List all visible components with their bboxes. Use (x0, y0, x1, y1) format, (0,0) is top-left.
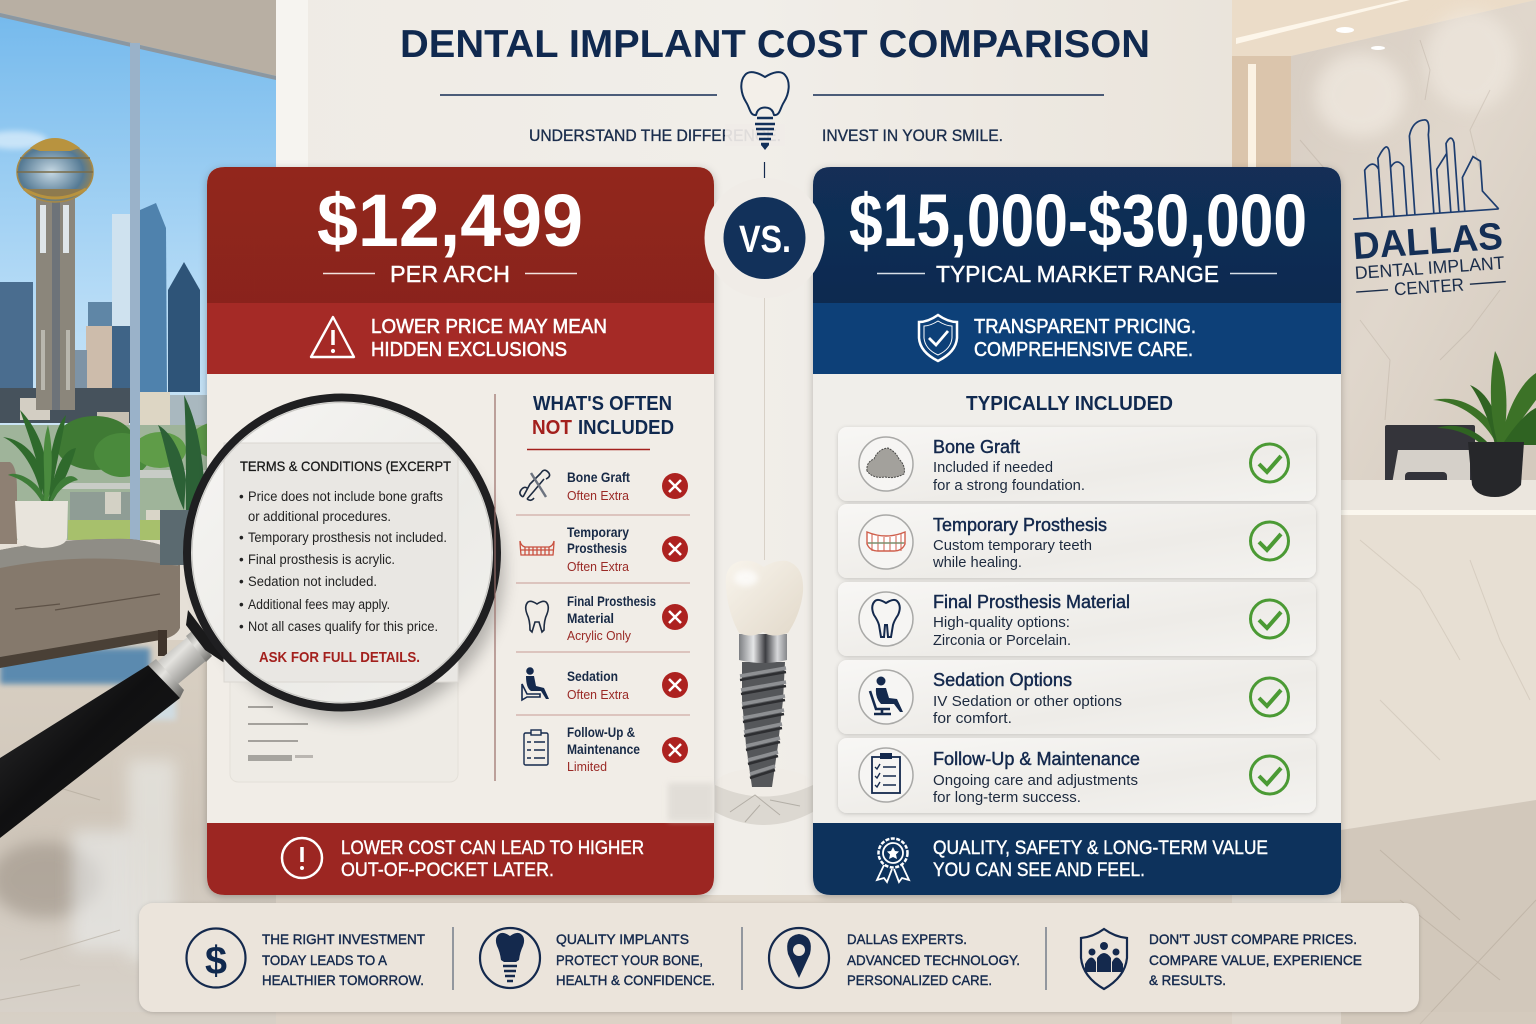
back plant (158, 395, 205, 510)
icon: exclamation circle (282, 838, 322, 878)
row: bone graft often extra (520, 469, 688, 503)
warning text: LOWER PRICE MAY MEAN (371, 316, 607, 338)
row: follow-up limited: Limited (567, 759, 607, 774)
magnifier handle (0, 664, 180, 838)
card: final prosthesis material included: Final Prosthesis Material (933, 592, 1130, 612)
terms text: Price does not include bone grafts (248, 489, 443, 504)
row: sedation often extra: Often Extra (567, 687, 630, 702)
row: bone graft often extra: Often Extra (567, 488, 630, 503)
icon: denture (859, 515, 913, 569)
magnifier lens (187, 398, 497, 708)
terms text: • (239, 552, 244, 567)
icon: seated patient (859, 670, 913, 724)
icon: warning triangle (311, 317, 354, 357)
benefit: right investment (186, 928, 425, 988)
Reunion Tower (17, 138, 93, 410)
terms text: ASK FOR FULL DETAILS. (259, 649, 420, 666)
row: temporary prosthesis often extra (520, 524, 688, 574)
check mark (1250, 600, 1288, 638)
card: follow-up and maintenance included: for long-term success. (933, 790, 1081, 806)
terms text: • (239, 489, 244, 504)
benefit: Dallas experts: PERSONALIZED CARE. (847, 972, 992, 988)
benefit: quality implants: HEALTH & CONFIDENCE. (556, 972, 715, 988)
terms text: Sedation not included. (248, 574, 377, 589)
terms text: • (239, 619, 244, 634)
panel: market price (blue) (813, 167, 1341, 895)
left price header (207, 167, 714, 303)
terms text: or additional procedures. (248, 509, 391, 524)
icon: map pin (769, 928, 829, 988)
benefit: compare value (1081, 929, 1362, 989)
right footer message: QUALITY, SAFETY & LONG-TERM VALUE (933, 838, 1268, 859)
icon: award rosette (877, 838, 909, 882)
logo wordmark: DALLAS (1352, 216, 1504, 268)
row: bone graft often extra: Bone Graft (567, 469, 630, 485)
panel: our price (red) (207, 167, 714, 895)
benefit: compare value: COMPARE VALUE, EXPERIENCE (1149, 952, 1362, 968)
row: final prosthesis material acrylic only: Material (567, 610, 614, 626)
right pricing band (813, 303, 1341, 374)
benefit: compare value: & RESULTS. (1149, 972, 1226, 988)
pricing text: COMPREHENSIVE CARE. (974, 339, 1193, 361)
right price heading (849, 179, 1307, 287)
icon: bone (520, 470, 550, 500)
card: final prosthesis material included: Zirconia or Porcelain. (933, 633, 1071, 649)
benefit: Dallas experts: ADVANCED TECHNOLOGY. (847, 952, 1020, 968)
card: bone graft included: Bone Graft (933, 437, 1020, 457)
card: temporary prosthesis included (838, 504, 1316, 578)
center vertical guide lines (764, 162, 766, 560)
right price heading: $15,000-$30,000 (849, 179, 1307, 262)
left footer band (207, 823, 714, 895)
card: temporary prosthesis included: Temporary Prosthesis (933, 515, 1107, 535)
benefit: quality implants (480, 928, 715, 988)
title: DENTAL IMPLANT COST COMPARISON (400, 23, 1150, 66)
card: follow-up and maintenance included: Ongoing care and adjustments (933, 773, 1138, 789)
check mark (1250, 444, 1288, 482)
left footer message (282, 838, 644, 881)
right price header (813, 167, 1341, 303)
card: temporary prosthesis included: Custom temporary teeth (933, 538, 1092, 554)
card: follow-up and maintenance included: Follow-Up & Maintenance (933, 749, 1140, 769)
card: sedation options included (838, 660, 1316, 734)
bottom benefits strip (139, 903, 1419, 1012)
warning text (371, 316, 607, 361)
left panel body (207, 167, 714, 895)
terms text (239, 458, 451, 666)
benefit: quality implants: QUALITY IMPLANTS (556, 931, 689, 947)
benefit: right investment: THE RIGHT INVESTMENT (262, 931, 425, 947)
terms text: Final prosthesis is acrylic. (248, 552, 395, 567)
wall logo: Dallas Dental Implant Center (1345, 115, 1506, 302)
left footer message: LOWER COST CAN LEAD TO HIGHER (341, 838, 644, 859)
terms text: Temporary prosthesis not included. (248, 530, 447, 545)
terms text: Additional fees may apply. (248, 597, 390, 612)
exclusions column divider (494, 394, 496, 781)
magnifying glass (0, 398, 504, 838)
sofa plant (3, 410, 78, 502)
terms text: • (239, 530, 244, 545)
trees and city below (0, 425, 276, 540)
terms text: TERMS & CONDITIONS (EXCERPT (240, 458, 451, 474)
row: follow-up limited (524, 724, 688, 774)
wall logo: Dallas Dental Implant Center: CENTER (1393, 275, 1465, 299)
row: follow-up limited: Follow-Up & (567, 724, 635, 740)
row: temporary prosthesis often extra: Temporary (567, 524, 629, 540)
row: final prosthesis material acrylic only (526, 593, 688, 643)
terms document (lower sheet) (230, 620, 458, 782)
wall logo: Dallas Dental Implant Center: DENTAL IMPLANT (1354, 253, 1505, 283)
heading: what's often not included: INCLUDED (578, 417, 674, 439)
card: sedation options included: Sedation Options (933, 670, 1072, 690)
icon: clipboard (524, 730, 548, 765)
card: sedation options included: IV Sedation or other options (933, 694, 1122, 710)
benefit: right investment: HEALTHIER TOMORROW. (262, 972, 424, 988)
right panel body (813, 167, 1341, 895)
left footer message: OUT-OF-POCKET LATER. (341, 860, 554, 881)
icon: tooth (526, 601, 548, 632)
check mark (1250, 678, 1288, 716)
icon: tooth implant (859, 592, 913, 646)
subtitle: INVEST IN YOUR SMILE. (822, 127, 1003, 145)
terms text: Not all cases qualify for this price. (248, 619, 438, 634)
card: follow-up and maintenance included (838, 738, 1316, 813)
panel notch behind VS badge (704, 178, 824, 298)
reception plant (1433, 351, 1536, 497)
row: final prosthesis material acrylic only: Acrylic Only (567, 628, 631, 643)
marble base edge over panels (668, 783, 714, 821)
icon: seated patient (522, 667, 549, 700)
icon: Dallas skyline outline (1347, 115, 1499, 219)
heading: what's often not included (527, 393, 674, 450)
check mark (1250, 522, 1288, 560)
row: sedation often extra (522, 667, 688, 702)
benefit: quality implants: PROTECT YOUR BONE, (556, 952, 703, 968)
pricing text (974, 316, 1196, 361)
card: final prosthesis material included (838, 582, 1316, 656)
heading: what's often not included: WHAT'S OFTEN (533, 393, 672, 415)
card: bone graft included: Included if needed (933, 460, 1053, 476)
pricing text: TRANSPARENT PRICING. (974, 316, 1196, 338)
card: temporary prosthesis included: while healing. (932, 555, 1022, 571)
icon: denture (520, 541, 554, 555)
benefit: Dallas experts (769, 928, 1020, 988)
icon: dollar circle: $ (205, 939, 227, 983)
row: temporary prosthesis often extra: Prosthesis (567, 540, 627, 556)
icon: implant circle (480, 928, 540, 988)
right footer message (877, 838, 1268, 882)
VS badge (724, 197, 806, 279)
card: sedation options included: for comfort. (933, 711, 1012, 727)
icon: dollar circle (186, 928, 246, 988)
heading: what's often not included: NOT (532, 417, 572, 439)
right price heading: TYPICAL MARKET RANGE (936, 261, 1219, 287)
left price heading: PER ARCH (390, 261, 510, 287)
benefit: Dallas experts: DALLAS EXPERTS. (847, 931, 967, 947)
right footer band (813, 823, 1341, 895)
implant model with marble base (715, 561, 813, 825)
benefit: right investment: TODAY LEADS TO A (262, 952, 388, 968)
right footer message: YOU CAN SEE AND FEEL. (933, 860, 1145, 881)
VS badge: VS. (739, 219, 791, 261)
warning text: HIDDEN EXCLUSIONS (371, 339, 567, 361)
icon: clipboard (859, 748, 913, 802)
magnifier ring (187, 398, 497, 708)
icon: shield check (919, 315, 957, 361)
left price heading: $12,499 (317, 179, 583, 262)
subtitle (529, 124, 1003, 146)
card: final prosthesis material included: High-quality options: (933, 615, 1070, 631)
check mark (1250, 756, 1288, 794)
sofa (0, 462, 17, 544)
icon: bone graft (859, 437, 913, 491)
row: temporary prosthesis often extra: Often Extra (567, 559, 630, 574)
subtitle: UNDERSTAND THE DIFFERENCE. (529, 127, 781, 145)
icon: tooth implant (741, 72, 789, 150)
left warning band (207, 303, 714, 374)
row: follow-up limited: Maintenance (567, 741, 640, 757)
terms text: • (239, 574, 244, 589)
row: sedation often extra: Sedation (567, 668, 618, 684)
row: final prosthesis material acrylic only: Final Prosthesis (567, 593, 656, 609)
benefit: compare value: DON'T JUST COMPARE PRICES. (1149, 931, 1357, 947)
magnifier shadow (200, 420, 504, 720)
card: bone graft included (838, 427, 1316, 501)
heading: typically included: TYPICALLY INCLUDED (966, 393, 1173, 415)
icon: people shield (1081, 929, 1127, 989)
card: bone graft included: for a strong foundation. (933, 478, 1085, 494)
terms text: • (239, 597, 244, 612)
title rules (440, 94, 1104, 96)
